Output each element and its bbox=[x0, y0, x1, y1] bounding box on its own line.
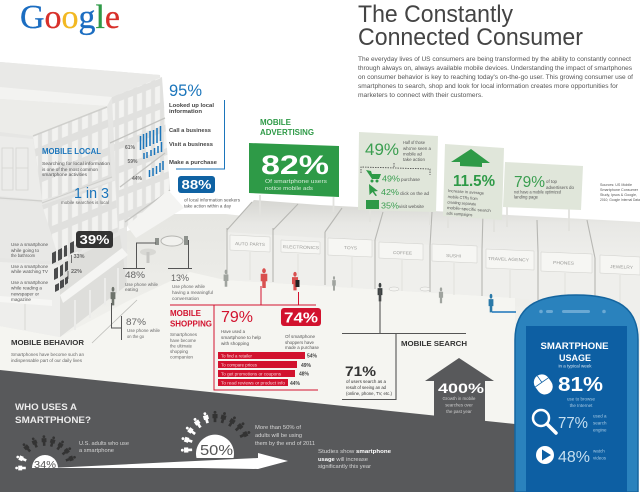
badge: 74%: Of smartphone bbox=[285, 334, 316, 339]
heading: mobile behavior: MOBILE BEHAVIOR bbox=[11, 338, 84, 347]
title: Connected Consumer bbox=[358, 24, 583, 51]
stat: 79%: with shopping bbox=[221, 341, 250, 346]
billboard: 49% bbox=[358, 132, 438, 212]
lower roof bbox=[0, 99, 107, 136]
billboard: 49%: visit website bbox=[399, 204, 425, 209]
heading: smartphone usage: in a typical week bbox=[558, 364, 592, 368]
usage captions: Use a smartphone bbox=[11, 264, 49, 269]
left facade windows bbox=[33, 107, 112, 200]
stat: 79%: smartphone to help bbox=[221, 335, 262, 340]
bar chart: 49% bbox=[301, 363, 312, 369]
mobile local description: Searching for local information bbox=[42, 161, 111, 166]
street figures bbox=[111, 270, 493, 312]
shop signs: ELECTRONICS bbox=[283, 244, 319, 250]
upper roof bbox=[0, 62, 160, 97]
mobile behavior description: indispensable part of our daily lives bbox=[11, 358, 83, 363]
billboard: 49%: mobile ad bbox=[403, 152, 423, 156]
stat: 95%: 95% bbox=[169, 81, 202, 100]
breakdown: 35% bbox=[381, 200, 399, 210]
shop signs bbox=[235, 241, 633, 270]
stat: 48%: eating bbox=[125, 287, 139, 292]
badge caption: of local information seekers bbox=[184, 198, 240, 202]
caption: search: search bbox=[593, 420, 607, 426]
intro text: through always on, always available mobile devices. Understanding the impact of smartphones bbox=[358, 65, 632, 72]
icon: website bbox=[366, 200, 379, 209]
mobile shopping description: Smartphones bbox=[170, 332, 198, 337]
billboard: 82%: 82% bbox=[261, 150, 329, 180]
caption: videos: watch bbox=[593, 448, 605, 454]
billboard: 82% bbox=[249, 143, 339, 197]
breakdown bbox=[381, 174, 400, 210]
stat: 87%: Use phone while bbox=[127, 328, 161, 333]
blue phone connector bbox=[492, 311, 516, 313]
billboard: 79%: not have a mobile optimized bbox=[514, 190, 562, 194]
up arrow: 400%: 400% bbox=[438, 380, 485, 396]
panel: mobile advertising bbox=[249, 118, 583, 232]
red frame lines bbox=[170, 286, 318, 390]
awning bbox=[127, 190, 184, 238]
people group: 34% bbox=[15, 435, 77, 471]
caption: browse: use to browse bbox=[567, 396, 596, 402]
billboard: 79% bbox=[503, 162, 583, 210]
stat: 81%: 81% bbox=[558, 374, 603, 396]
usage captions: Use a smartphone bbox=[11, 242, 49, 247]
caption: browse bbox=[567, 396, 596, 408]
caption: studies show bbox=[318, 449, 391, 470]
usage captions: magazine bbox=[11, 297, 32, 302]
sources note bbox=[600, 183, 640, 202]
shop signs: COFFEE bbox=[393, 250, 412, 256]
stat: 79%: 79% bbox=[221, 309, 253, 326]
stat: 71%: result of seeing an ad bbox=[346, 385, 387, 390]
billboard: 11.5%: 11.5% bbox=[453, 173, 495, 190]
heading: smartphone usage: SMARTPHONE bbox=[540, 341, 608, 352]
badge: 74% bbox=[281, 308, 321, 350]
billboard: 79%: landing page bbox=[514, 194, 539, 200]
action list: Make a purchase bbox=[169, 160, 217, 166]
heading: who uses a smartphone: SMARTPHONE? bbox=[15, 415, 91, 425]
caption: search: engine bbox=[593, 428, 607, 432]
bar percentages: 61% bbox=[125, 145, 136, 151]
mobile shopping description: have become bbox=[170, 338, 197, 343]
caption: search bbox=[593, 414, 607, 432]
heading: who uses a smartphone: WHO USES A bbox=[15, 402, 78, 412]
stat: 71% bbox=[345, 363, 393, 396]
33% and 22% bbox=[68, 254, 85, 279]
billboard: 49%: take action bbox=[403, 157, 426, 162]
heading: smartphone usage: USAGE bbox=[559, 353, 591, 364]
panel: mobile search bbox=[342, 290, 494, 425]
heading: mobile shopping: MOBILE bbox=[170, 309, 202, 318]
up arrow: 400% bbox=[425, 358, 494, 425]
heading: who uses a smartphone bbox=[15, 402, 91, 425]
bar chart: 44% bbox=[290, 381, 301, 387]
intro text: smartphones to search, shop and look for local information creates more opportunities for bbox=[358, 83, 618, 90]
panel: smartphone usage phone bbox=[515, 295, 638, 492]
stat: 79% bbox=[221, 309, 262, 346]
mobile behavior description bbox=[11, 352, 85, 363]
sources note: 2010; Google Internal Data bbox=[600, 198, 640, 202]
callout lines bbox=[112, 240, 192, 340]
panel: mobile shopping bbox=[170, 268, 321, 390]
bar chart: To compare prices bbox=[221, 362, 257, 368]
dark windows bbox=[52, 241, 74, 292]
icon: up arrow bbox=[451, 149, 490, 167]
caption: us adults bbox=[79, 441, 129, 454]
badge: 39% bbox=[76, 231, 113, 248]
sources note: Study, Ipsos & Google, bbox=[600, 193, 637, 197]
stat: 13%: conversation bbox=[172, 296, 200, 301]
intro text bbox=[358, 56, 633, 99]
phone earpiece and sensors bbox=[539, 310, 606, 313]
action list: Looked up local bbox=[169, 103, 214, 109]
caption: more than 50%: adults will be using bbox=[255, 433, 302, 439]
bar percentages: 44% bbox=[132, 176, 143, 182]
stat: 48%: 48% bbox=[125, 270, 146, 281]
caption: more than 50%: them by the end of 2011 bbox=[255, 441, 315, 447]
billboard: 79%: of top bbox=[546, 179, 558, 184]
mobile local description: is one of the most common bbox=[42, 167, 99, 172]
stat: 71%: (online, phone, TV, etc.) bbox=[346, 391, 393, 396]
badge caption: take action within a day bbox=[184, 204, 232, 208]
shop signs: SUSHI bbox=[446, 253, 461, 259]
window bars bbox=[140, 126, 163, 177]
stat: 13% bbox=[171, 273, 213, 301]
mobile local description: smartphone activities bbox=[42, 172, 88, 177]
icon: cursor bbox=[369, 184, 378, 196]
caption: search: used a bbox=[593, 414, 607, 418]
badge: 88% bbox=[178, 176, 215, 193]
stat: 71%: of users search as a bbox=[346, 379, 387, 384]
caption: studies show: Studies show smartphone bbox=[318, 449, 391, 455]
heading: mobile search: MOBILE SEARCH bbox=[401, 339, 467, 348]
floor and street bbox=[0, 214, 640, 430]
billboard: 11.5%: mobile CTRs from bbox=[448, 194, 478, 201]
usage captions: newspaper or bbox=[11, 292, 40, 296]
action list bbox=[169, 103, 217, 166]
usage captions: while watching TV bbox=[11, 269, 48, 274]
billboard: 49%: 49% bbox=[365, 140, 399, 159]
logo: Google bbox=[20, 0, 120, 36]
action list: Call a business bbox=[169, 128, 211, 134]
stat: 48%: Use phone while bbox=[125, 282, 159, 287]
sign posts bbox=[260, 195, 569, 232]
stat: 87% bbox=[126, 317, 161, 339]
heading: mobile advertising bbox=[260, 118, 314, 137]
heading: mobile advertising: MOBILE bbox=[260, 118, 291, 127]
bar chart: To find a retailer bbox=[221, 354, 253, 358]
people group: 50%: 50% bbox=[200, 442, 233, 459]
caption: studies show: significantly this year bbox=[318, 464, 371, 470]
stat: 79%: Have used a bbox=[221, 329, 246, 334]
dark band bbox=[0, 370, 515, 492]
people group: 50% bbox=[181, 411, 251, 459]
usage captions bbox=[11, 242, 49, 302]
people group: 34%: 34% bbox=[34, 459, 56, 471]
icon: play bbox=[536, 446, 554, 464]
badge: 74%: 74% bbox=[284, 310, 318, 326]
up arrow: 400%: the past year bbox=[446, 409, 472, 414]
shop row bbox=[225, 200, 640, 312]
up arrow: 400%: Growth in mobile bbox=[443, 396, 476, 401]
billboard: 49%: who've seen a bbox=[403, 146, 432, 151]
action list: information bbox=[169, 109, 203, 115]
heading: mobile local: MOBILE LOCAL bbox=[42, 147, 101, 156]
action list: Visit a business bbox=[169, 142, 213, 148]
phone screen bbox=[526, 326, 627, 492]
title: The Constantly bbox=[358, 1, 514, 28]
mobile shopping description: shopping bbox=[170, 349, 189, 354]
stat: 13%: 13% bbox=[171, 273, 190, 284]
stat: 13%: Use phone while bbox=[172, 284, 206, 289]
billboard: 82%: Of smartphone users bbox=[265, 179, 327, 185]
breakdown: 49% bbox=[382, 174, 400, 184]
usage captions: the bathroom bbox=[11, 253, 35, 258]
heading: smartphone usage bbox=[540, 341, 608, 368]
phone body bbox=[515, 295, 638, 492]
caption: videos: videos bbox=[593, 456, 607, 460]
panel: mobile behavior bbox=[11, 231, 213, 363]
bar chart: 48% bbox=[299, 372, 310, 378]
billboard: 79%: advertisers do bbox=[546, 185, 575, 190]
bar percentages bbox=[125, 145, 143, 182]
badge: 88%: 88% bbox=[182, 177, 212, 192]
connector lines bbox=[342, 290, 466, 400]
intro text: on consumer behavior is key to reaching today's on-the-go user. This growing consumer use of bbox=[358, 74, 633, 81]
stat: 48%: 48% bbox=[558, 449, 590, 466]
up arrow: 400%: searches over bbox=[445, 402, 473, 408]
heading: mobile advertising: ADVERTISING bbox=[260, 128, 314, 137]
mobile behavior description: Smartphones have become such an bbox=[11, 352, 85, 357]
stat: 77%: 77% bbox=[558, 415, 588, 432]
dotted connector bbox=[361, 163, 430, 175]
patio tables bbox=[140, 236, 188, 263]
badge: 74%: made a purchase bbox=[285, 345, 320, 350]
sources note: Sources: US Mobile bbox=[600, 183, 632, 187]
shop signs: TOYS bbox=[344, 245, 357, 250]
badge: 39%: 39% bbox=[80, 232, 110, 247]
right facade windows bbox=[112, 77, 170, 230]
white growth arrow bbox=[50, 453, 288, 469]
bar chart bbox=[218, 352, 318, 387]
mobile local description bbox=[42, 161, 111, 177]
33% and 22%: 33% bbox=[74, 254, 85, 260]
billboard: 82%: notice mobile ads bbox=[265, 186, 313, 192]
red figures bbox=[261, 268, 300, 290]
mobile shopping description bbox=[170, 332, 198, 360]
billboard: 11.5% bbox=[443, 144, 504, 220]
title bbox=[358, 1, 583, 51]
usage captions: while reading a bbox=[11, 286, 43, 290]
blue bracket bbox=[176, 100, 224, 169]
sources note: Smartphone Consumer bbox=[600, 188, 639, 192]
mobile shopping description: the ultimate bbox=[170, 344, 193, 348]
building block bbox=[0, 62, 184, 337]
caption: us adults: a smartphone bbox=[79, 448, 114, 454]
stat: 71%: 71% bbox=[345, 363, 377, 379]
shop signs: TRAVEL AGENCY bbox=[488, 256, 529, 262]
usage captions: while going to bbox=[11, 248, 40, 253]
stat: 13%: having a meaningful bbox=[172, 290, 213, 295]
caption: us adults: U.S. adults who use bbox=[79, 441, 129, 447]
stat: 87%: 87% bbox=[126, 317, 147, 328]
caption: videos bbox=[593, 448, 607, 460]
shop signs: JEWELRY bbox=[610, 264, 633, 270]
heading: mobile shopping bbox=[170, 309, 212, 328]
billboard: 11.5%: Increase in average bbox=[448, 188, 485, 196]
stat: 1 in 3: 1 in 3 bbox=[74, 185, 109, 202]
icon: cart bbox=[366, 170, 381, 182]
usage captions: Use a smartphone bbox=[11, 280, 49, 285]
billboard: 11.5%: mobile-specific search bbox=[447, 205, 492, 213]
heading: mobile shopping: SHOPPING bbox=[170, 320, 212, 328]
badge caption bbox=[184, 198, 240, 208]
billboard: 49%: Half of those bbox=[403, 140, 426, 145]
intro text: marketers to connect with their customers. bbox=[358, 92, 483, 99]
billboard: 49%: purchase bbox=[401, 177, 421, 182]
bar chart: 54% bbox=[307, 354, 318, 360]
stat: 87%: on the go bbox=[127, 334, 145, 339]
panel: mobile local bbox=[42, 81, 240, 208]
billboard: 49%: click on the ad bbox=[400, 191, 430, 196]
breakdown: 42% bbox=[381, 187, 399, 197]
bar percentages: 59% bbox=[128, 159, 138, 165]
caption: studies show: usage will increase bbox=[318, 457, 368, 463]
caption: browse: the Internet bbox=[570, 403, 593, 408]
stat caption: mobile searches is local bbox=[61, 200, 109, 205]
bar chart: To get promotions or coupons bbox=[221, 372, 281, 376]
shop signs: PHONES bbox=[553, 260, 574, 266]
33% and 22%: 22% bbox=[71, 269, 82, 275]
icon: magnifier bbox=[533, 410, 556, 433]
billboard: 79%: 79% bbox=[514, 174, 545, 191]
mobile shopping description: companion bbox=[170, 354, 194, 360]
badge: 74%: shoppers have bbox=[285, 340, 315, 345]
panel: who uses a smartphone bbox=[15, 402, 391, 471]
intro text: The everyday lives of US consumers are being transformed by the ability to constantly connect bbox=[358, 56, 631, 63]
billboard: 11.5%: ads campaigns bbox=[446, 210, 473, 217]
stat: 48% bbox=[125, 270, 159, 292]
icon: mouse bbox=[531, 371, 556, 398]
bar chart: To read reviews or product info bbox=[221, 380, 286, 386]
caption: more than 50% bbox=[255, 425, 315, 447]
billboard: 11.5%: creating separate bbox=[447, 199, 477, 207]
shop signs: AUTO PARTS bbox=[235, 241, 265, 247]
caption: more than 50%: More than 50% of bbox=[255, 425, 302, 431]
